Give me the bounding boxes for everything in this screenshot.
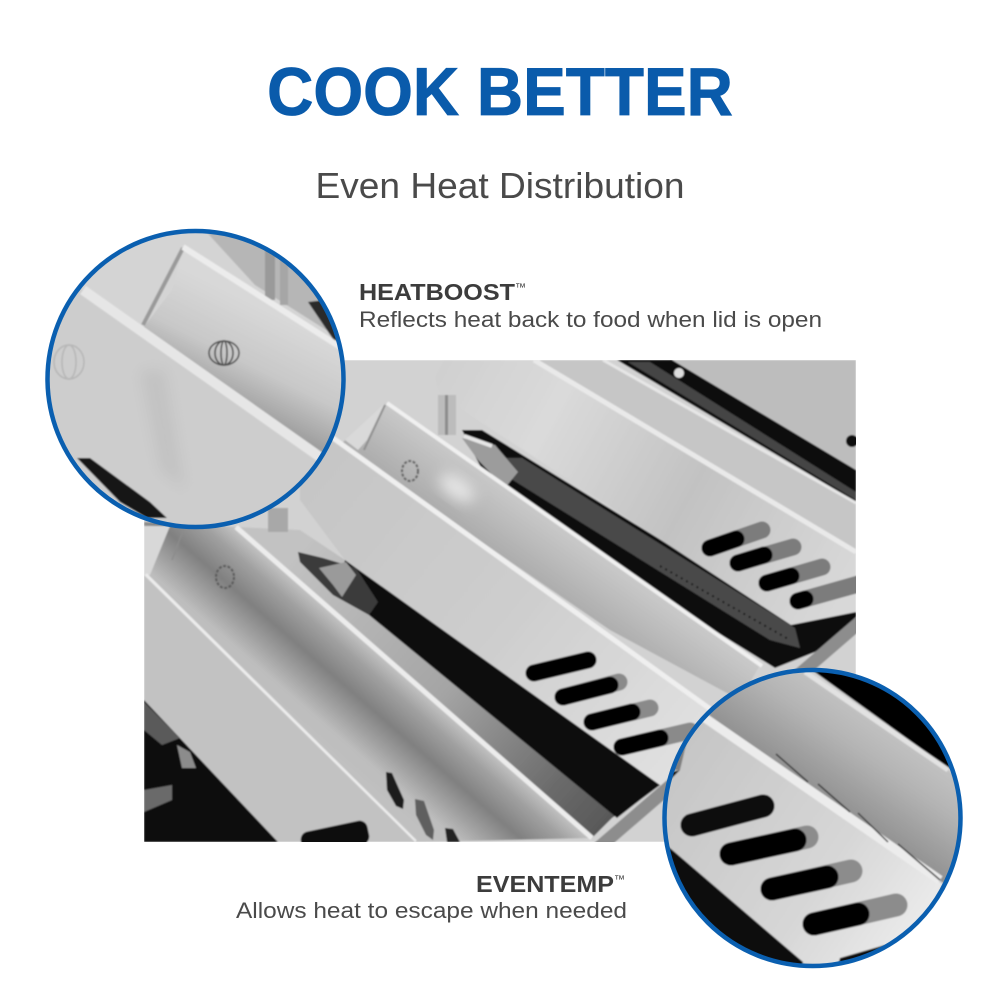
eventemp callout bbox=[236, 871, 627, 923]
heatboost callout bbox=[359, 279, 822, 332]
eventemp callout: ™ bbox=[614, 874, 625, 886]
lens plate bbox=[668, 723, 942, 964]
far right burner gap bbox=[617, 360, 858, 502]
eventemp callout: Allows heat to escape when needed bbox=[236, 898, 627, 923]
right plate vent slots bbox=[710, 530, 862, 601]
subtitle: Even Heat Distribution bbox=[316, 165, 684, 206]
lens trough bbox=[144, 306, 340, 452]
middle plate vent slots bbox=[534, 660, 690, 747]
side vent slots bbox=[300, 771, 460, 842]
support post bbox=[438, 395, 456, 435]
lens lower-left black bbox=[670, 846, 804, 964]
heatboost callout: ™ bbox=[515, 282, 526, 294]
lower-left dark area bbox=[144, 700, 278, 842]
flame logo middle bbox=[402, 461, 418, 481]
icon: flame logo faint bbox=[54, 345, 84, 379]
lens ridge bbox=[705, 718, 940, 880]
lens black corner bbox=[814, 672, 950, 770]
right plate bbox=[532, 360, 856, 626]
title: COOK BETTER bbox=[267, 53, 733, 129]
middle plate back face bbox=[340, 403, 762, 700]
eventemp callout: EVENTEMP bbox=[476, 871, 614, 897]
heatboost callout: Reflects heat back to food when lid is open bbox=[359, 307, 822, 332]
icon: flame logo dark bbox=[209, 341, 239, 365]
magnifier: eventemp bbox=[660, 665, 970, 975]
lens ridge bbox=[83, 290, 330, 464]
lens plate bbox=[40, 262, 330, 540]
middle plate ridge bbox=[333, 438, 720, 716]
heatboost callout: HEATBOOST bbox=[359, 279, 516, 305]
flame logo left bbox=[216, 566, 234, 588]
lens lower-left dark bbox=[77, 458, 167, 518]
grill rod bbox=[596, 622, 860, 850]
left trough bbox=[144, 522, 592, 842]
middle plate front face bbox=[300, 442, 708, 786]
grill photo bbox=[144, 360, 862, 857]
left front face bbox=[144, 575, 415, 842]
lens upper right bracket bbox=[208, 234, 336, 342]
magnifier: heatboost bbox=[40, 225, 350, 540]
middle burner gap bbox=[462, 430, 856, 668]
lens trough bbox=[709, 672, 958, 883]
far top-right plate bbox=[663, 360, 856, 472]
left burner gap bbox=[236, 508, 660, 838]
lens vent slots bbox=[692, 806, 896, 924]
